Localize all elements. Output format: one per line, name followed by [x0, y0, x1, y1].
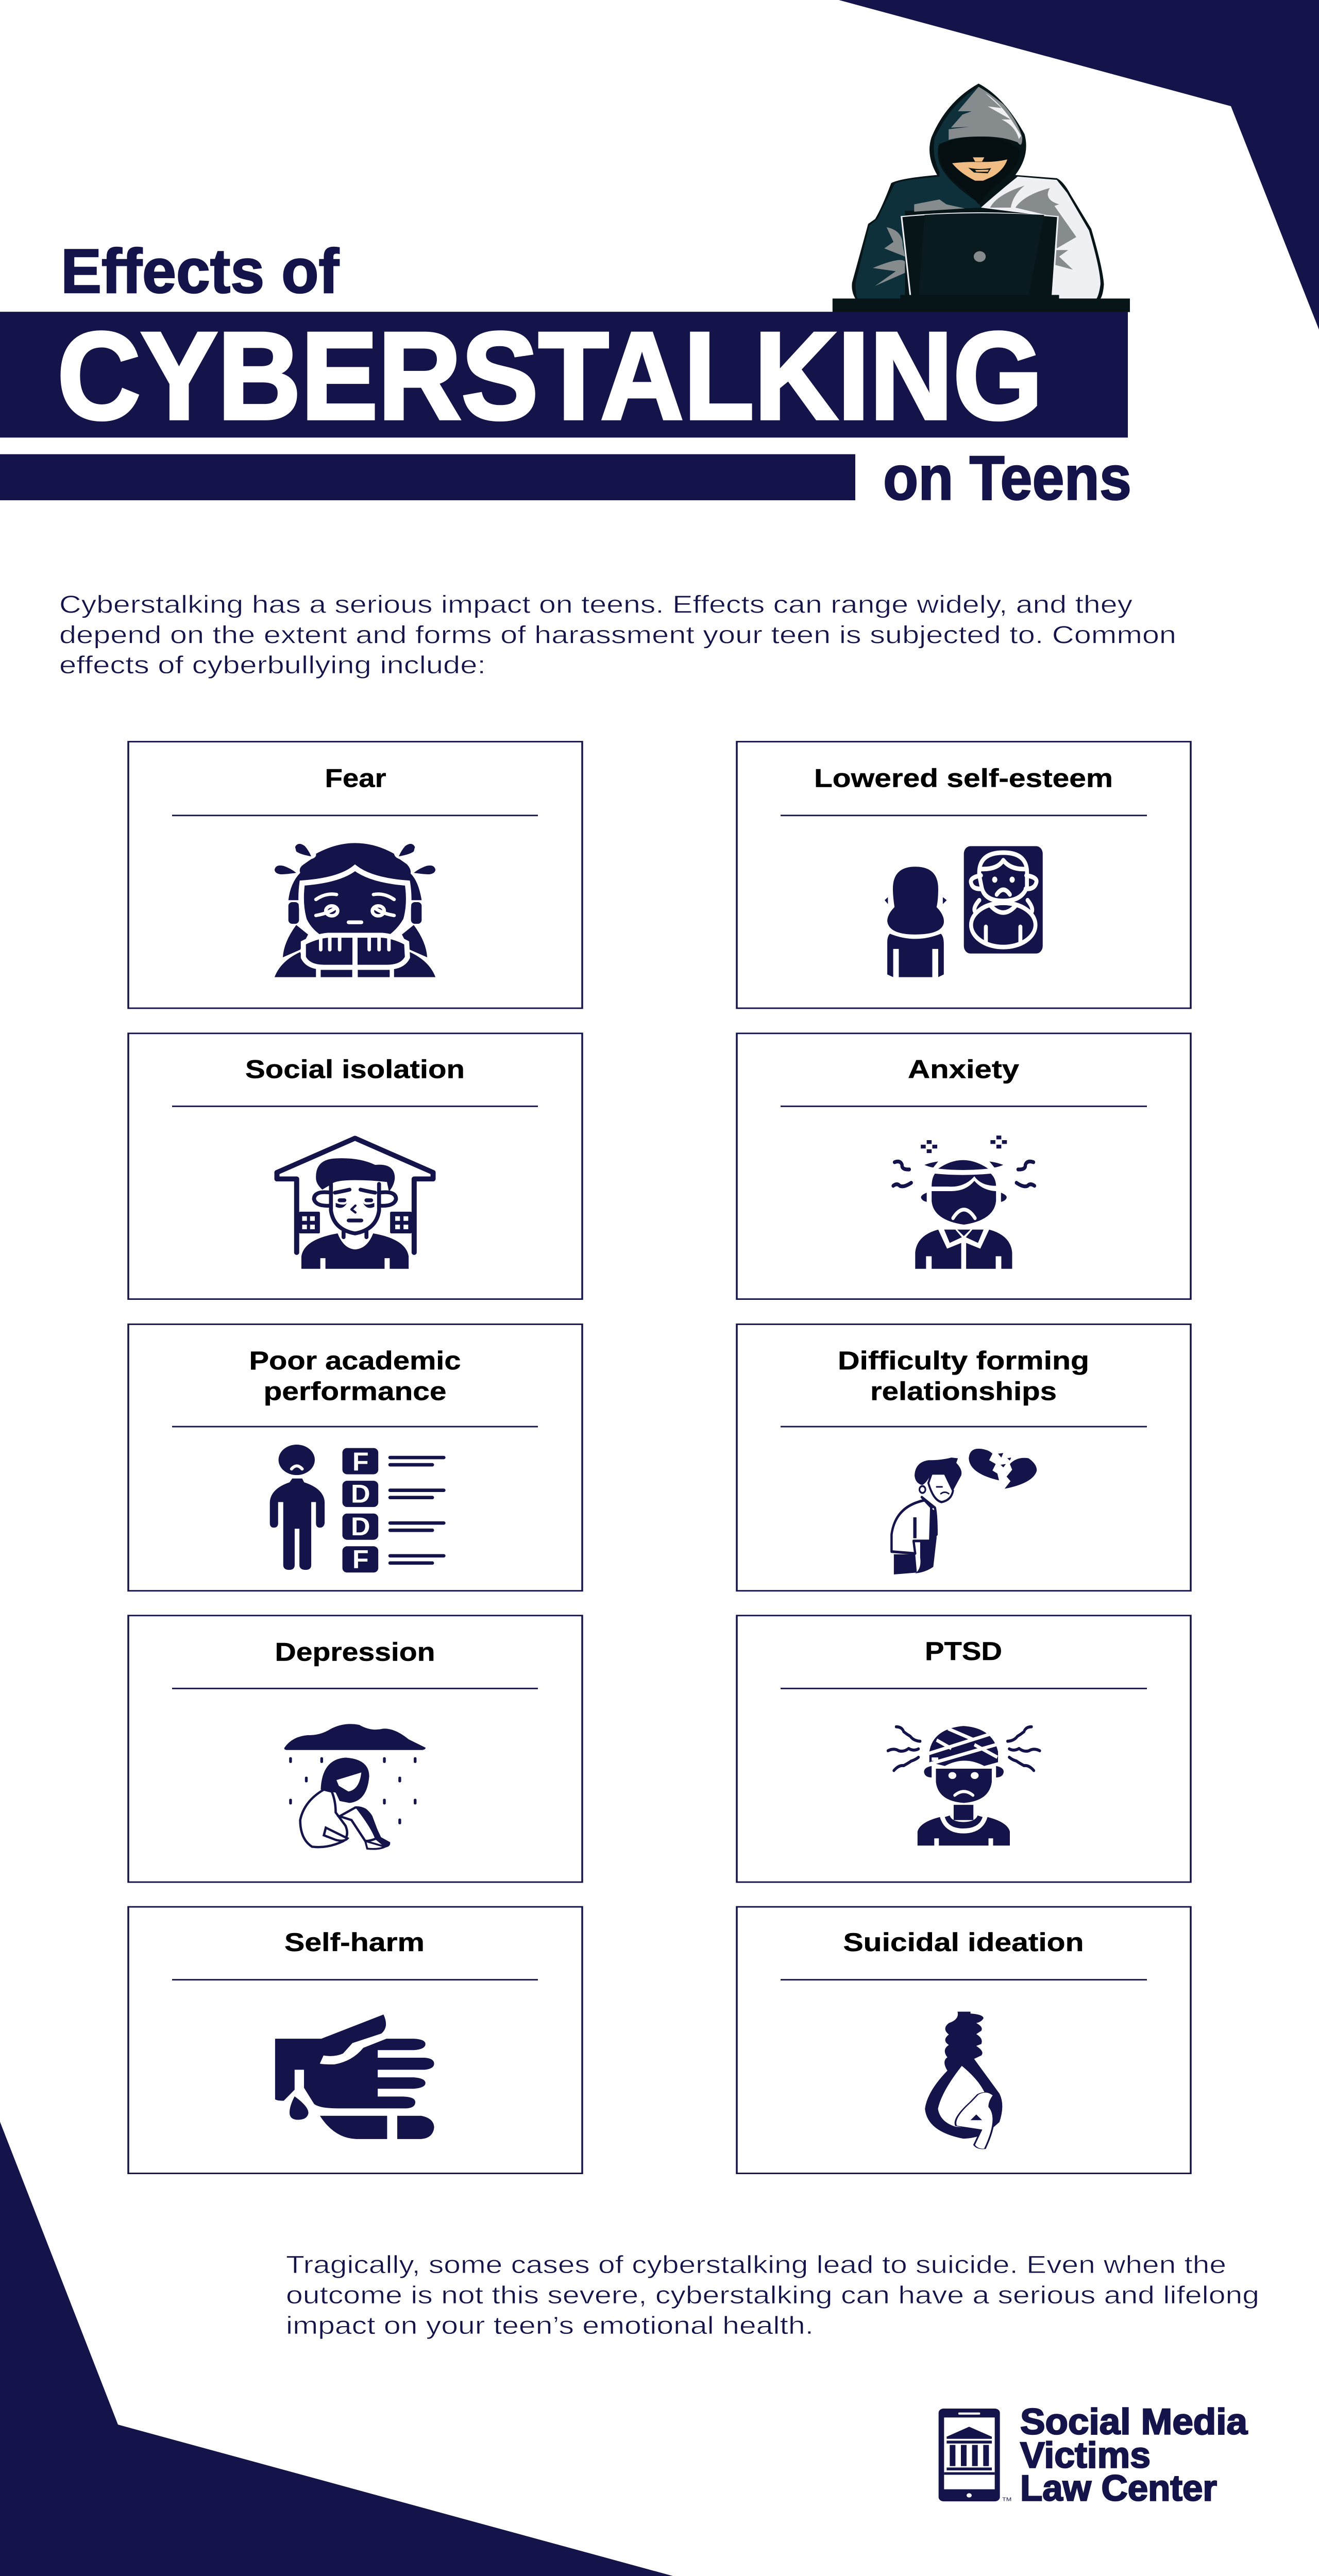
panel: Difficulty forming relationships: Difficulty forming — [838, 1346, 1089, 1375]
panel: Depression — [128, 1616, 582, 1882]
closing paragraph: Tragically, some cases of cyberstalking lead to suicide. Even when the — [286, 2251, 1226, 2279]
panel: Poor academic performance: Poor academic — [249, 1346, 461, 1375]
icon: anxious man with dizzy marks — [893, 1136, 1035, 1269]
panel: Difficulty forming relationships — [737, 1324, 1191, 1591]
panel: Social isolation: Social isolation — [245, 1055, 465, 1084]
panel: PTSD: PTSD — [925, 1637, 1002, 1666]
panel: Difficulty forming relationships: relationships — [870, 1377, 1057, 1406]
icon: person facing sad mirror reflection — [885, 846, 1043, 977]
illustration: hooded hacker at laptop — [833, 83, 1130, 312]
panel: Suicidal ideation: Suicidal ideation — [843, 1928, 1084, 1957]
panel: Fear — [128, 742, 582, 1008]
panel: Anxiety — [737, 1033, 1191, 1299]
title banner: CYBERSTALKING: CYBERSTALKING — [57, 306, 1043, 445]
bottom left corner shape — [0, 2122, 673, 2576]
top right corner shape — [839, 0, 1319, 330]
panel: Poor academic performance: performance — [264, 1377, 447, 1406]
icon: student with failing grades: D — [351, 1479, 370, 1508]
panel: Self-harm — [128, 1907, 582, 2174]
icon: noose with curled figure — [925, 2012, 1002, 2149]
icon: student with failing grades — [270, 1445, 444, 1573]
panel: Anxiety: Anxiety — [908, 1055, 1019, 1084]
icon: isolated boy inside house — [277, 1138, 433, 1269]
closing paragraph — [286, 2251, 1259, 2340]
logo: Social Media Victims Law Center: Law Center — [1020, 2467, 1217, 2509]
icon: girl sitting under rain cloud — [284, 1724, 426, 1849]
panel: Depression: Depression — [275, 1637, 435, 1666]
icon: bandaged head with stress marks — [888, 1726, 1040, 1845]
icon: phone with courthouse: TM — [1002, 2497, 1011, 2502]
logo: Social Media Victims Law Center — [939, 2401, 1248, 2509]
heading: Effects of: Effects of — [61, 236, 340, 306]
icon: student with failing grades: F — [352, 1545, 369, 1573]
icon: sad boy with broken heart — [891, 1449, 1037, 1574]
heading: on Teens: on Teens — [883, 443, 1131, 513]
intro paragraph — [59, 591, 1176, 679]
logo: Social Media Victims Law Center: Social Media — [1020, 2401, 1248, 2442]
icon: hand with blade and blood drop — [275, 2014, 434, 2139]
panel: Lowered self-esteem: Lowered self-esteem — [814, 764, 1113, 792]
panel: Self-harm: Self-harm — [284, 1928, 425, 1957]
panel: Social isolation — [128, 1033, 582, 1299]
panel: Suicidal ideation — [737, 1907, 1191, 2174]
panel: PTSD — [737, 1616, 1191, 1882]
icon: frightened girl — [275, 843, 435, 977]
closing paragraph: impact on your teen’s emotional health. — [286, 2312, 814, 2340]
closing paragraph: outcome is not this severe, cyberstalking can have a serious and lifelong — [286, 2282, 1259, 2309]
icon: student with failing grades: D — [351, 1512, 370, 1541]
decorative lower banner bar — [0, 454, 855, 500]
icon: phone with courthouse — [939, 2409, 1011, 2502]
logo: Social Media Victims Law Center: Victims — [1020, 2435, 1151, 2476]
panel: Poor academic performance — [128, 1324, 582, 1591]
icon: student with failing grades: F — [352, 1447, 369, 1476]
intro paragraph: effects of cyberbullying include: — [59, 652, 486, 679]
intro paragraph: Cyberstalking has a serious impact on teens. Effects can range widely, and they — [59, 591, 1132, 618]
panel: Lowered self-esteem — [737, 742, 1191, 1008]
intro paragraph: depend on the extent and forms of harassment your teen is subjected to. Common — [59, 621, 1176, 649]
panel: Fear: Fear — [325, 764, 386, 792]
